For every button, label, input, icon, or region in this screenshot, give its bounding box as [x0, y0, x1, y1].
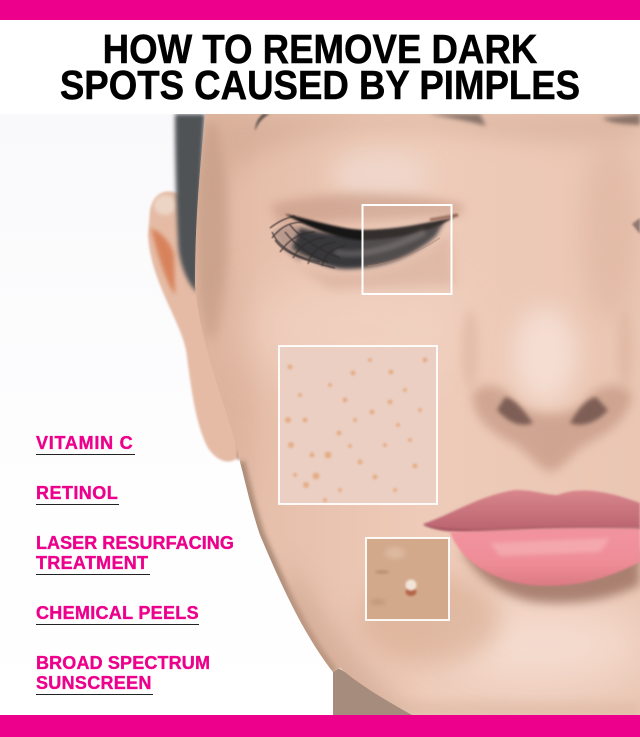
list item: laser resurfacing treatment: TREATMENT [36, 553, 148, 573]
title [0, 20, 640, 114]
lips [423, 490, 640, 603]
bottom pink bar [0, 715, 640, 737]
jaw edge shadow [240, 462, 333, 672]
list item: broad spectrum sunscreen: BROAD SPECTRUM [36, 653, 210, 673]
hair [175, 114, 205, 292]
list item: retinol: RETINOL [36, 483, 118, 503]
eyebrows [255, 114, 640, 131]
eye at right edge [632, 218, 640, 234]
list item: vitamin C: VITAMIN C [36, 433, 133, 453]
closed eye with lashes [270, 214, 458, 269]
list item: laser resurfacing treatment: LASER RESURFACING [36, 533, 234, 553]
face photo illustration [146, 114, 640, 715]
inset: pimple [366, 538, 449, 620]
inset: skin with dark spots [279, 346, 437, 504]
list item: laser resurfacing treatment [36, 533, 234, 575]
brow-bone shading [224, 114, 638, 164]
list item: chemical peels: CHEMICAL PEELS [36, 603, 199, 623]
nose [462, 307, 633, 472]
face shading [196, 120, 228, 340]
list item: broad spectrum sunscreen: SUNSCREEN [36, 673, 152, 693]
title: HOW TO REMOVE DARK [103, 26, 537, 72]
title: SPOTS CAUSED BY PIMPLES [60, 62, 580, 108]
face [170, 114, 640, 718]
inset: eye wrinkles [362, 205, 452, 294]
neck [333, 665, 420, 715]
shadow around eye socket [270, 194, 465, 225]
list item: broad spectrum sunscreen [36, 653, 210, 695]
ear [148, 191, 240, 462]
top pink bar [0, 0, 640, 20]
